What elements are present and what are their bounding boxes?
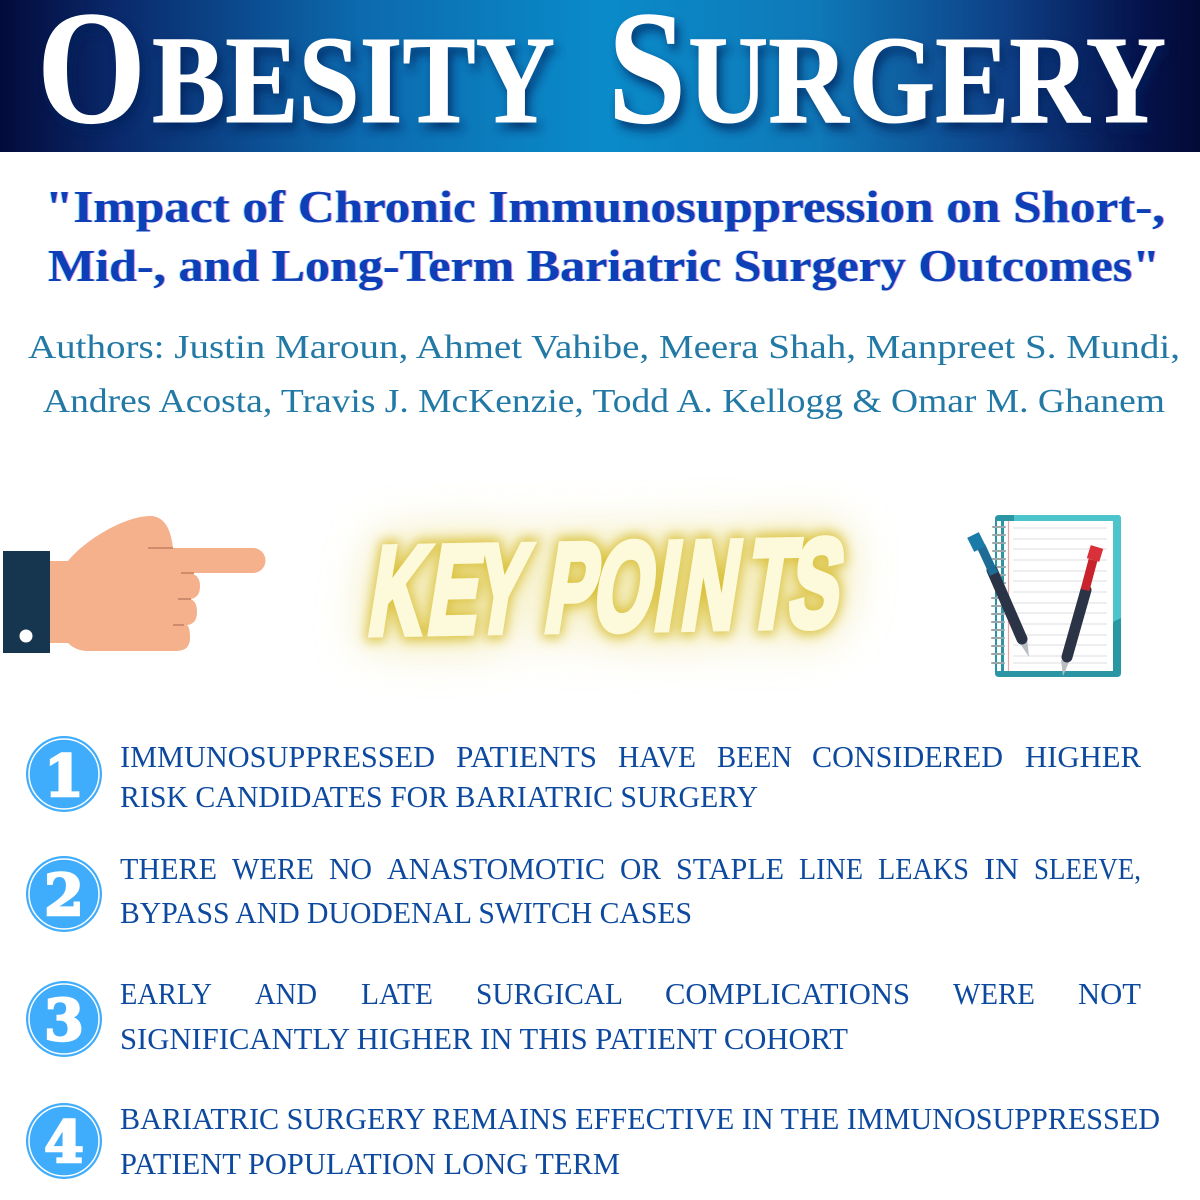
header banner with journal title: BESITY [152, 12, 555, 150]
text: point 1: PATIENTS [456, 740, 597, 774]
heading: Key Points: KEY POINTS [361, 514, 853, 662]
text: point 1: HAVE [618, 740, 696, 774]
article title [45, 181, 1165, 291]
text: point 2: LEAKS [878, 852, 969, 886]
text: point 2: ANASTOMOTIC [387, 852, 605, 886]
icon: pointing hand [3, 516, 266, 653]
icon: number 4 badge: 4 [44, 1109, 84, 1176]
authors [28, 329, 1180, 420]
text: point 4: PATIENT POPULATION LONG TERM [120, 1147, 620, 1181]
text: point 1: BEEN [717, 740, 792, 774]
text: point 3: SURGICAL [476, 977, 623, 1011]
text: point 3 [120, 977, 1141, 1056]
icon: number 3 badge [26, 981, 102, 1057]
text: point 1: HIGHER [1025, 740, 1142, 774]
text: point 2: STAPLE [676, 852, 784, 886]
text: point 1: RISK CANDIDATES FOR BARIATRIC SURGERY [120, 780, 758, 814]
text: point 3: NOT [1078, 977, 1141, 1011]
heading: Key Points: KEY POINTS [361, 514, 853, 662]
text: point 3: AND [255, 977, 317, 1011]
text: point 2: WERE [232, 852, 314, 886]
icon: number 2 badge: 2 [44, 862, 84, 929]
text: point 2: SLEEVE, [1034, 852, 1141, 886]
text: point 2: IN [984, 852, 1019, 886]
text: point 1 [120, 740, 1142, 814]
authors: Authors: Justin Maroun, Ahmet Vahibe, Meera Shah, Manpreet S. Mundi, [28, 329, 1180, 366]
text: point 3: SIGNIFICANTLY HIGHER IN THIS PATIENT COHORT [120, 1022, 848, 1056]
text: point 1: IMMUNOSUPPRESSED [120, 740, 435, 774]
header banner with journal title: BESITY [156, 19, 559, 153]
heading: Key Points: KEY POINTS [361, 514, 853, 662]
text: point 3: EARLY [120, 977, 212, 1011]
header banner with journal title [0, 0, 1200, 153]
text: point 4 [120, 1102, 1160, 1181]
icon: number 2 badge [26, 856, 102, 932]
text: point 4: BARIATRIC SURGERY REMAINS EFFECTIVE IN THE IMMUNOSUPPRESSED [120, 1102, 1160, 1136]
icon: notebook and pens [967, 515, 1121, 677]
text: point 2: NO [329, 852, 372, 886]
point 1 [26, 736, 1142, 814]
icon: number 1 badge: 1 [44, 743, 84, 810]
text: point 2: THERE [120, 852, 217, 886]
icon: number 1 badge [26, 736, 102, 812]
article title: "Impact of Chronic Immunosuppression on Short-, [45, 181, 1165, 232]
text: point 3: LATE [361, 977, 433, 1011]
point 4 [26, 1102, 1160, 1181]
article title: Mid-, and Long-Term Bariatric Surgery Outcomes" [48, 240, 1160, 291]
text: point 2: BYPASS AND DUODENAL SWITCH CASES [120, 896, 692, 930]
text: point 2: OR [620, 852, 662, 886]
point 2 [26, 852, 1141, 932]
text: point 3: WERE [953, 977, 1035, 1011]
point 3 [26, 977, 1141, 1057]
text: point 2 [120, 852, 1141, 930]
text: point 2: LINE [799, 852, 863, 886]
authors: Andres Acosta, Travis J. McKenzie, Todd A. Kellogg & Omar M. Ghanem [43, 383, 1165, 420]
icon: number 3 badge: 3 [44, 987, 84, 1054]
text: point 1: CONSIDERED [812, 740, 1003, 774]
text: point 3: COMPLICATIONS [665, 977, 910, 1011]
icon: number 4 badge [26, 1103, 102, 1179]
